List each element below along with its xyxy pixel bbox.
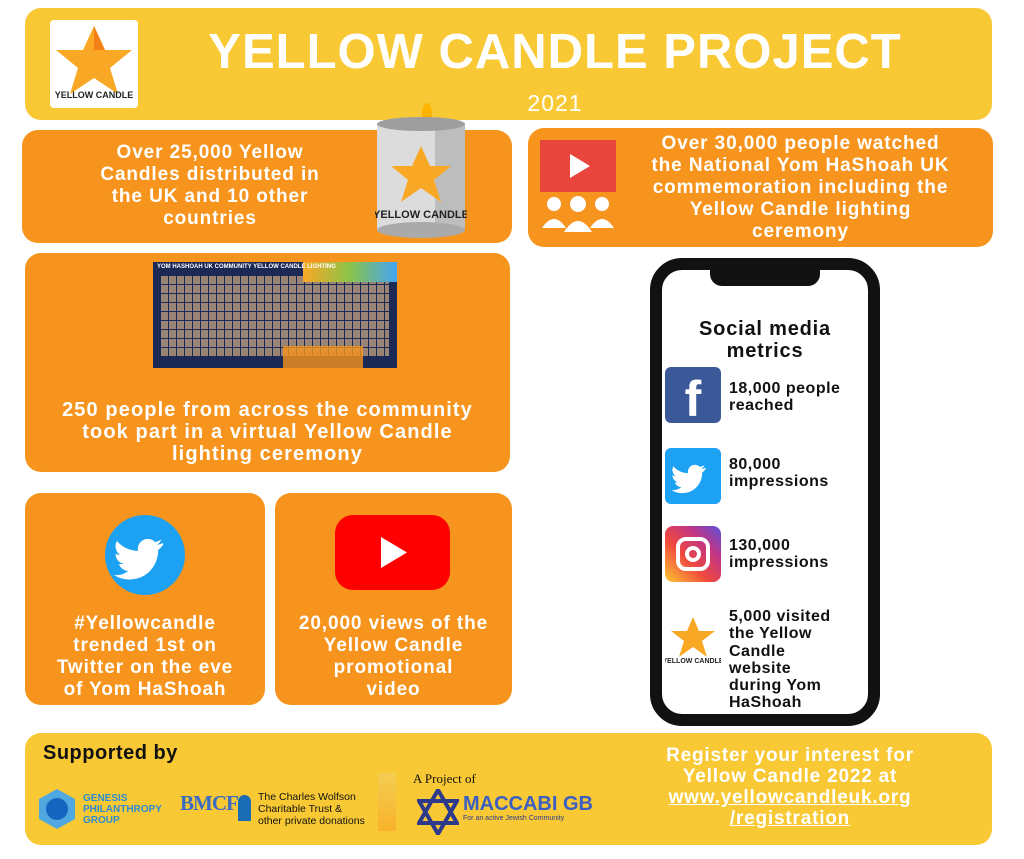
text: promotional (334, 657, 453, 678)
call to action: www.yellowcandleuk.org (669, 787, 911, 808)
sponsor logos: BMCF (180, 791, 238, 815)
metric: website: 5,000 visited (729, 608, 831, 625)
text: countries (163, 208, 257, 229)
footer panel (25, 733, 992, 845)
panel: national commemoration (528, 128, 993, 247)
text: of Yom HaShoah (64, 679, 226, 700)
icon: youtube (335, 515, 450, 590)
text (62, 399, 473, 465)
sponsor logos: A Project of (413, 771, 476, 786)
metric: website: during Yom (729, 677, 821, 694)
metric: facebook: 18,000 people (729, 380, 840, 397)
sponsor logos: GROUP (83, 815, 120, 826)
text: the UK and 10 other (112, 186, 308, 207)
call to action (666, 745, 914, 829)
text: 250 people from across the community (62, 399, 473, 421)
logo (50, 20, 138, 108)
text: Candles distributed in (100, 164, 320, 185)
text: Yellow Candle (324, 635, 463, 656)
year: 2021 (527, 90, 583, 116)
metric: website: the Yellow (729, 625, 812, 642)
call to action: /registration (730, 808, 850, 829)
notch (710, 268, 820, 286)
text (100, 142, 320, 229)
header panel (25, 8, 992, 120)
text: #Yellowcandle (74, 613, 216, 634)
icon: candle tin (375, 103, 467, 238)
text: Yellow Candle lighting (690, 199, 911, 220)
sponsor logos: Charitable Trust & (258, 803, 342, 815)
heading: metrics (727, 340, 803, 362)
sponsor logos: The Charles Wolfson (258, 791, 356, 803)
metric: instagram: impressions (729, 554, 829, 571)
text (651, 133, 950, 242)
sponsor logos: GENESIS (83, 793, 127, 804)
title: YELLOW CANDLE PROJECT (208, 25, 902, 79)
text: lighting ceremony (172, 443, 363, 465)
call to action: Yellow Candle 2022 at (683, 766, 897, 787)
sponsor logos: MACCABI GB (463, 793, 593, 815)
metric: twitter: 80,000 (729, 456, 781, 473)
logo: YELLOW CANDLE (55, 90, 133, 100)
icon: screen with audience (540, 140, 616, 232)
metric: facebook (665, 367, 840, 427)
panel: video views (275, 493, 512, 705)
phone: social media metrics (650, 258, 880, 726)
metric: instagram: 130,000 (729, 537, 790, 554)
text (57, 613, 233, 700)
icon: twitter (105, 515, 185, 595)
sponsor logos (39, 771, 593, 835)
sponsor logos: other private donations (258, 815, 365, 827)
metric: twitter (665, 448, 829, 504)
text: 20,000 views of the (299, 613, 488, 634)
text: Over 25,000 Yellow (117, 142, 303, 163)
text: ceremony (752, 221, 849, 242)
image: zoom grid: YOM HASHOAH UK COMMUNITY YELLOW CANDLE LIGHTING (157, 264, 336, 270)
text: took part in a virtual Yellow Candle (82, 421, 453, 443)
call to action: Register your interest for (666, 745, 914, 766)
panel: candles distributed (22, 130, 512, 243)
heading (699, 318, 831, 362)
metric: instagram (665, 526, 829, 582)
metric: facebook: reached (729, 397, 794, 414)
text: commemoration including the (653, 177, 948, 198)
metric: website: Candle (729, 643, 785, 660)
text: Twitter on the eve (57, 657, 233, 678)
panel: virtual ceremony (25, 253, 510, 472)
text: the National Yom HaShoah UK (651, 155, 950, 176)
sponsor logos: PHILANTHROPY (83, 804, 162, 815)
text: video (366, 679, 421, 700)
text: Over 30,000 people watched (662, 133, 939, 154)
text: trended 1st on (73, 635, 217, 656)
panel: twitter trend (25, 493, 265, 705)
heading: Social media (699, 318, 831, 340)
metric: website (665, 608, 831, 711)
metric: website: HaShoah (729, 694, 802, 711)
metric: website: website (729, 660, 791, 677)
sponsor logos: For an active Jewish Community (463, 815, 564, 822)
heading: supported by: Supported by (43, 742, 178, 764)
metric: facebook: f (685, 371, 701, 427)
image: zoom grid (153, 262, 397, 368)
metric: twitter: impressions (729, 473, 829, 490)
text (299, 613, 488, 700)
